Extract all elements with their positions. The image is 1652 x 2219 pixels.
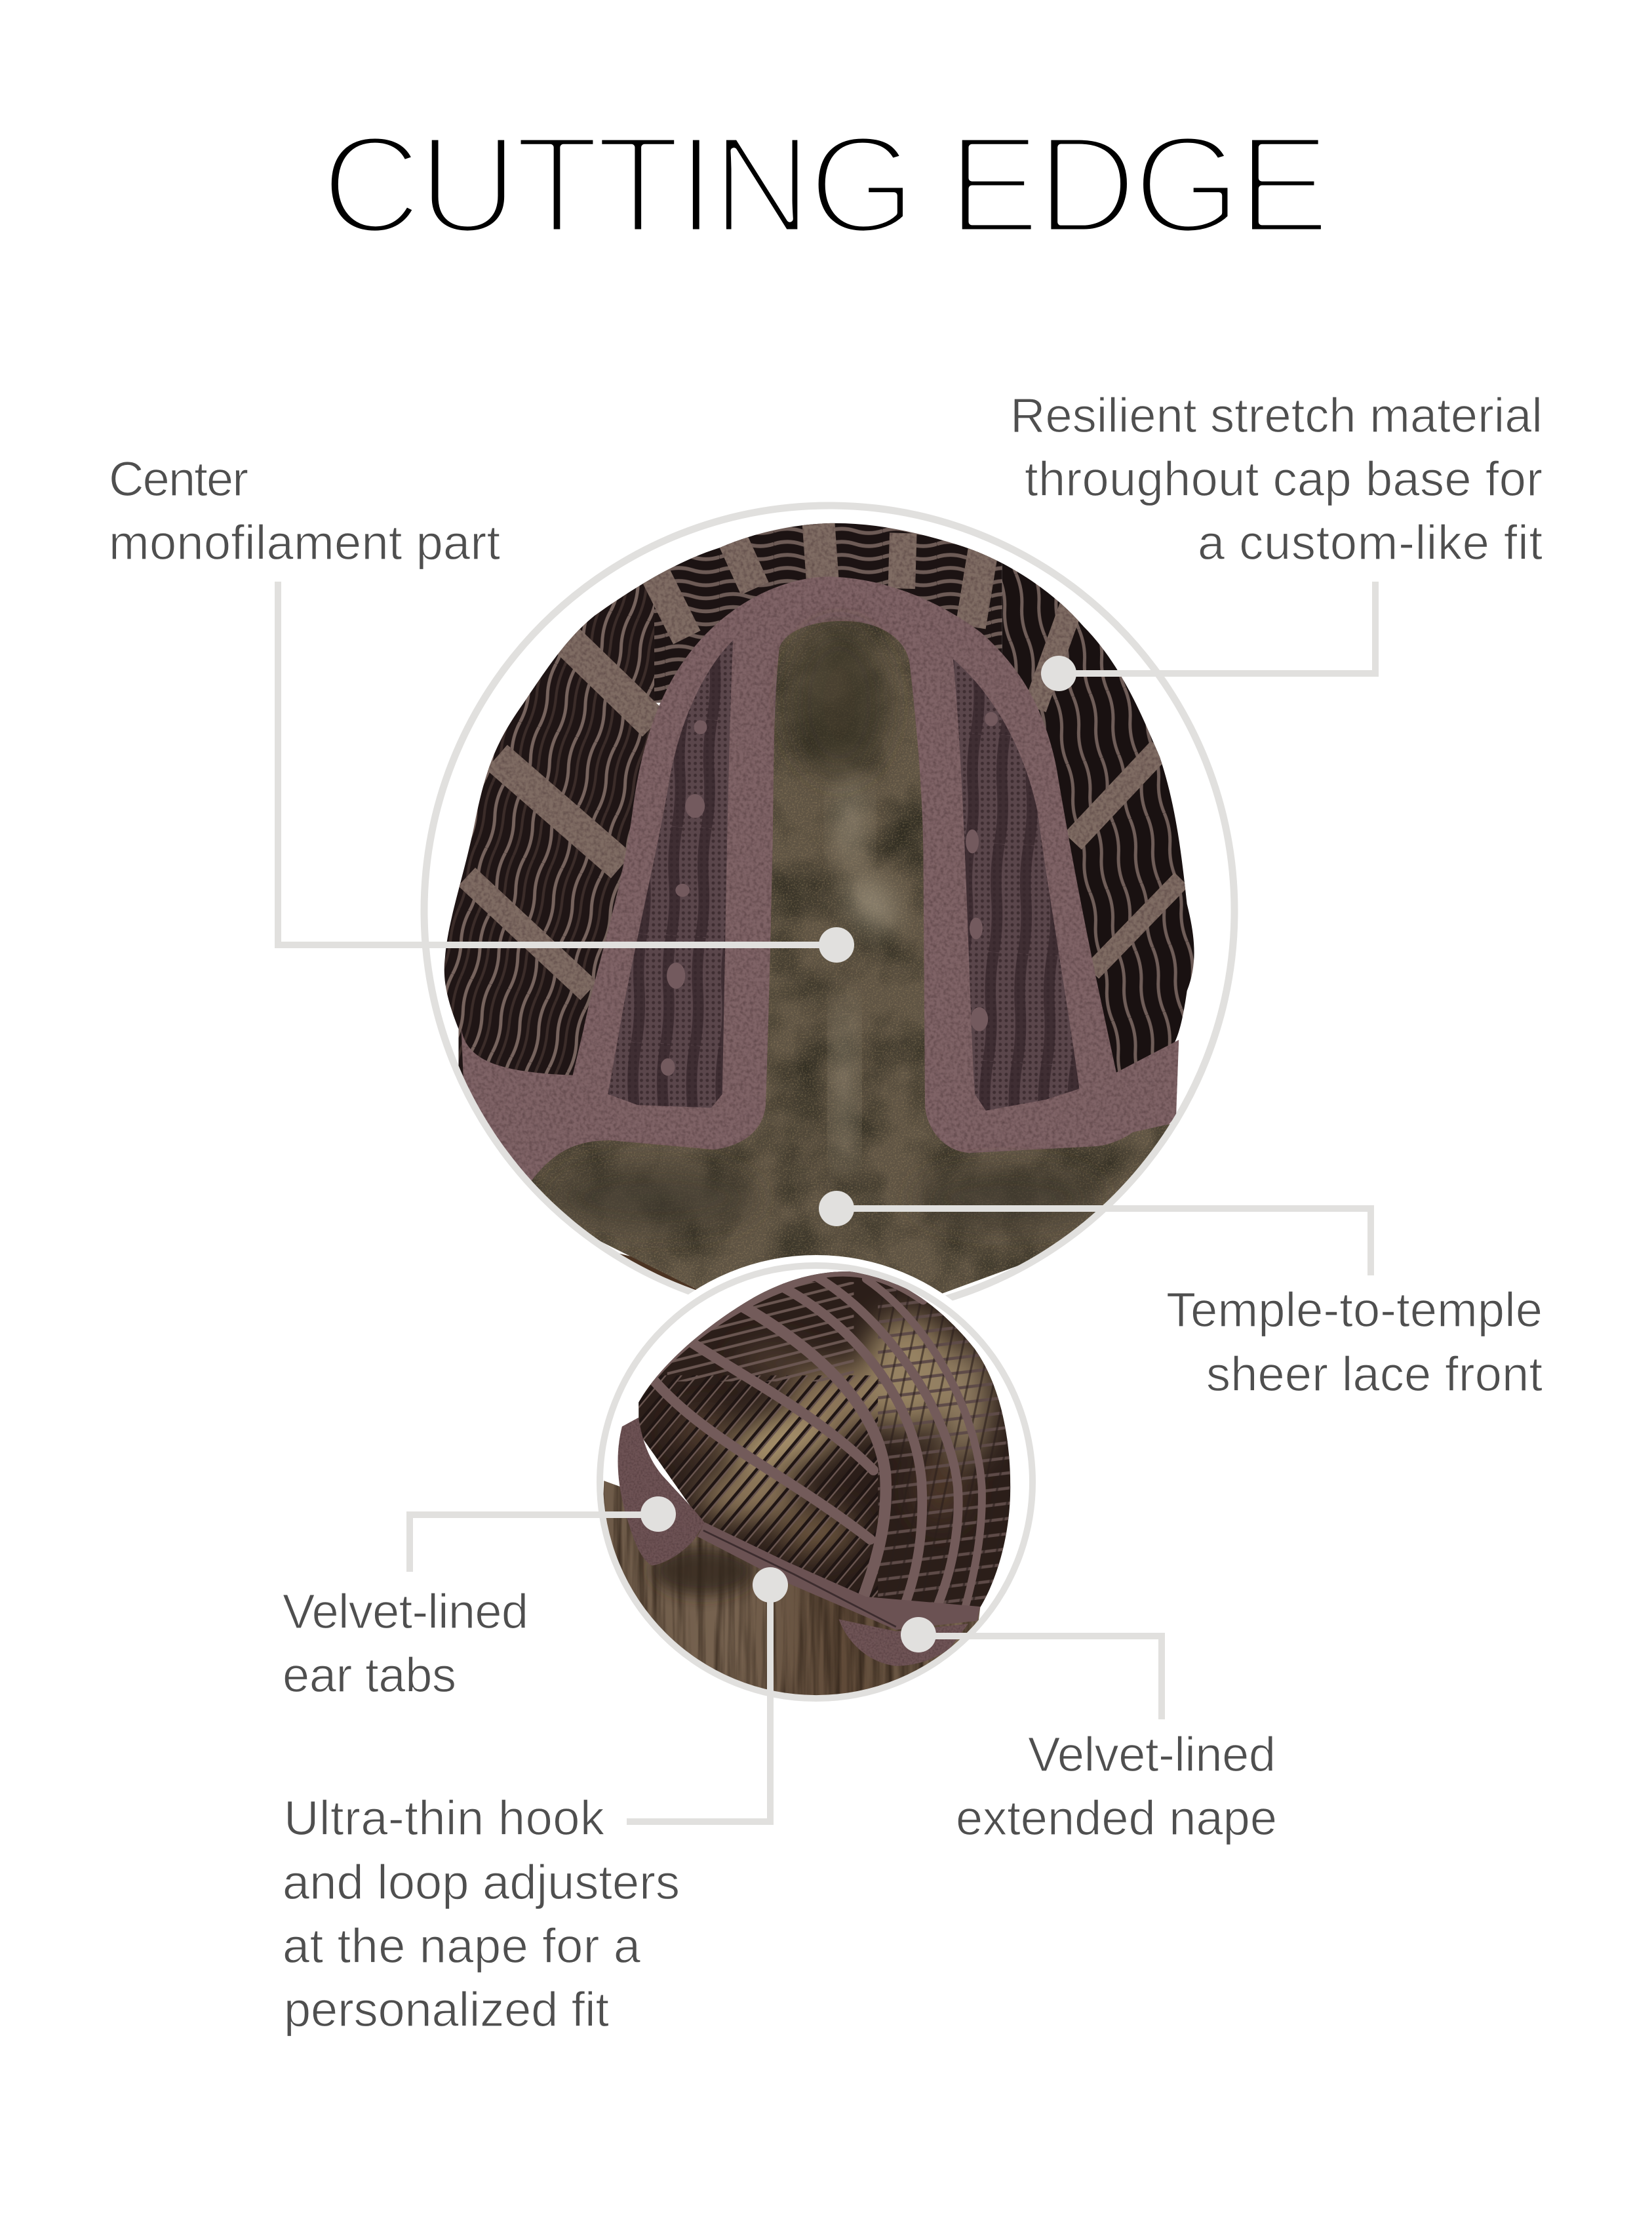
white backing disc <box>589 1255 1043 1709</box>
circle ring <box>600 1266 1032 1698</box>
cross lines <box>577 1375 878 1601</box>
label: sheer lace front <box>1206 1347 1543 1401</box>
tan elastic strips <box>467 522 1181 991</box>
callout: center monofilament part <box>109 452 854 963</box>
marker dot <box>819 1191 854 1226</box>
callout: temple-to-temple lace front <box>819 1191 1543 1401</box>
label: ear tabs <box>283 1648 456 1702</box>
dark lace blotches <box>551 1165 1100 1230</box>
curved bands <box>652 1272 982 1607</box>
cap exterior illustration <box>577 1246 1049 1718</box>
marker dot <box>1041 656 1076 691</box>
label: Ultra-thin hook <box>284 1791 605 1845</box>
monofilament and lace panel <box>502 621 1181 1296</box>
label: monofilament part <box>109 515 500 570</box>
hook and loop nape strap <box>698 1523 980 1629</box>
cap interior <box>577 1246 1049 1718</box>
marker dot <box>819 927 854 963</box>
wefts <box>444 523 1194 1089</box>
ear tab <box>618 1418 705 1566</box>
center part highlight <box>835 773 908 1176</box>
label: at the nape for a <box>283 1919 641 1973</box>
label: Resilient stretch material <box>1010 388 1543 443</box>
callout: velvet-lined ear tabs <box>283 1496 676 1702</box>
hair below the cap <box>595 1481 980 1704</box>
nape tab <box>839 1619 968 1666</box>
strap seam <box>703 1530 896 1627</box>
side mesh left <box>608 640 733 1108</box>
label: Center <box>109 452 248 506</box>
infographic canvas <box>111 139 1542 2036</box>
label: extended nape <box>956 1791 1277 1845</box>
mauve frame <box>462 576 1179 1192</box>
cap interior illustration <box>444 523 1194 1293</box>
hair shadow <box>652 1547 755 1595</box>
callout: resilient stretch material <box>1010 388 1543 691</box>
label: a custom-like fit <box>1198 515 1543 570</box>
dark top of part <box>790 627 888 779</box>
panel: small cap photo in circle <box>577 1246 1049 1718</box>
callout: velvet-lined extended nape <box>901 1617 1277 1845</box>
label: throughout cap base for <box>1025 452 1543 506</box>
label: Velvet-lined <box>283 1584 528 1639</box>
callout: hook and loop adjusters <box>283 1567 788 2037</box>
leader line <box>278 582 836 945</box>
leader line <box>1059 582 1375 673</box>
leader line <box>627 1585 770 1822</box>
label: Temple-to-temple <box>1166 1283 1543 1337</box>
panel: large cap photo in circle <box>421 502 1238 1301</box>
leader line <box>410 1515 658 1572</box>
side mesh right <box>953 659 1079 1111</box>
title: CUTTING EDGE <box>321 106 1330 262</box>
marker dot <box>640 1496 676 1532</box>
label: Velvet-lined <box>1028 1727 1276 1782</box>
marker dot <box>753 1567 788 1603</box>
lower hair strip <box>619 1254 696 1290</box>
label: personalized fit <box>284 1982 609 2037</box>
leader line <box>836 1209 1371 1275</box>
marker dot <box>901 1617 936 1652</box>
label: and loop adjusters <box>283 1855 680 1909</box>
leader line <box>918 1636 1162 1719</box>
circle ring <box>424 506 1234 1316</box>
